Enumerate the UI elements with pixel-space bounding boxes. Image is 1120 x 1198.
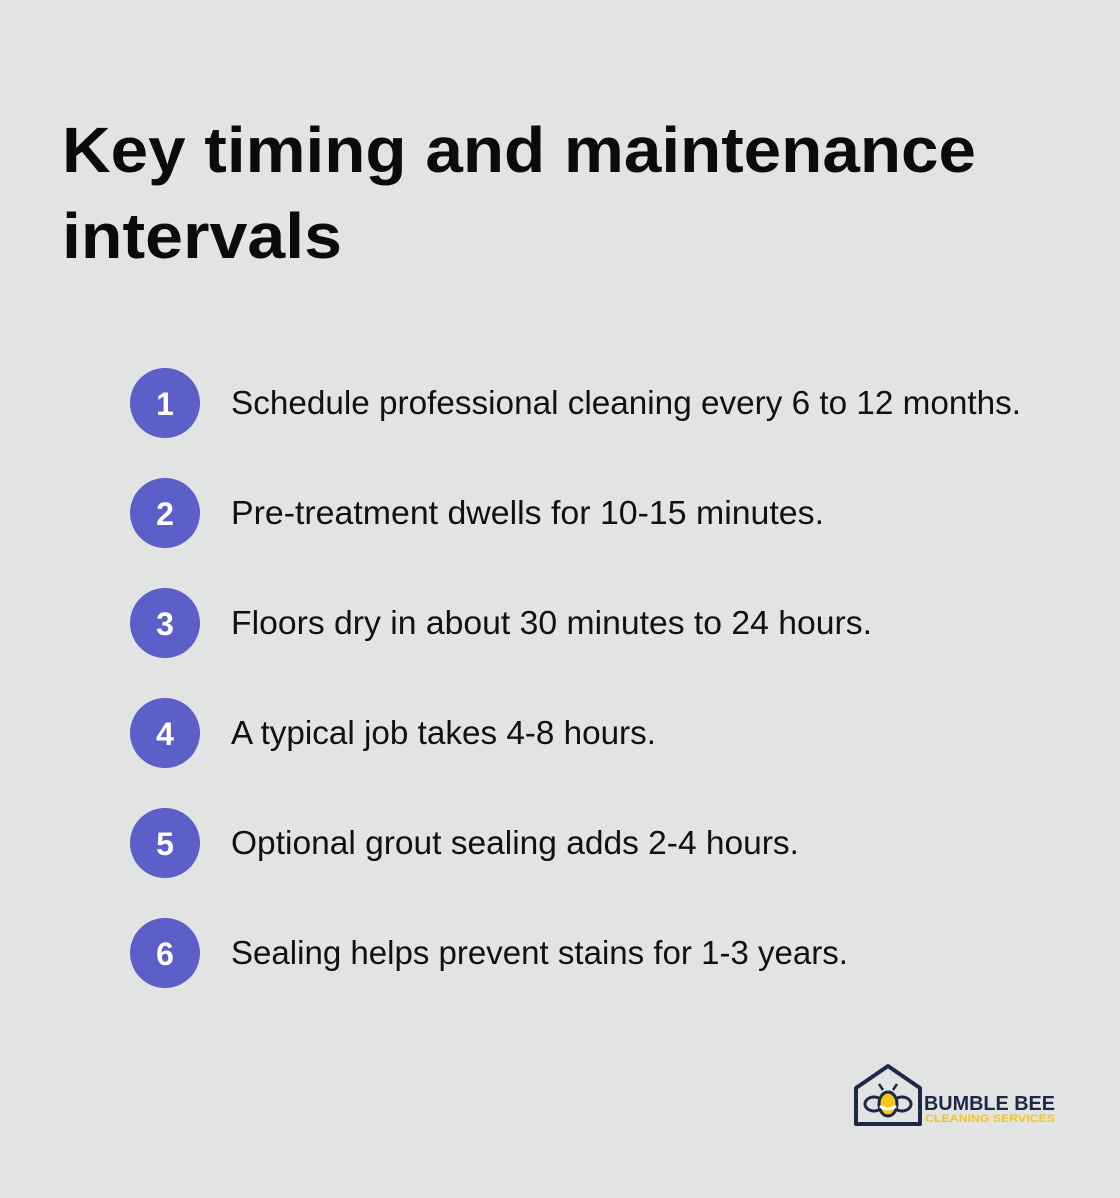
item 1	[130, 368, 1021, 438]
item 3: 3	[156, 606, 174, 642]
item 5	[130, 808, 799, 878]
item 3: Floors dry in about 30 minutes to 24 hours.	[231, 604, 872, 641]
title	[62, 114, 976, 272]
item 2	[130, 478, 824, 548]
item 1: Schedule professional cleaning every 6 to 12 months.	[231, 384, 1021, 421]
icon: house bee	[856, 1066, 920, 1124]
item 4: 4	[156, 716, 174, 752]
item 4	[130, 698, 656, 768]
item 6: 6	[156, 936, 174, 972]
item 2: 2	[156, 496, 174, 532]
item 3	[130, 588, 872, 658]
item 4: A typical job takes 4-8 hours.	[231, 714, 656, 751]
item 1: 1	[156, 386, 174, 422]
item 5: Optional grout sealing adds 2-4 hours.	[231, 824, 799, 861]
logo text: BUMBLE BEE	[924, 1093, 1055, 1115]
title: intervals	[62, 200, 342, 272]
item 6	[130, 918, 848, 988]
list items	[130, 368, 1021, 988]
logo: CLEANING SERVICES	[925, 1113, 1055, 1125]
logo	[856, 1066, 1055, 1125]
title: Key timing and maintenance	[62, 114, 976, 186]
item 2: Pre-treatment dwells for 10-15 minutes.	[231, 494, 824, 531]
item 6: Sealing helps prevent stains for 1-3 years.	[231, 934, 848, 971]
item 5: 5	[156, 826, 174, 862]
